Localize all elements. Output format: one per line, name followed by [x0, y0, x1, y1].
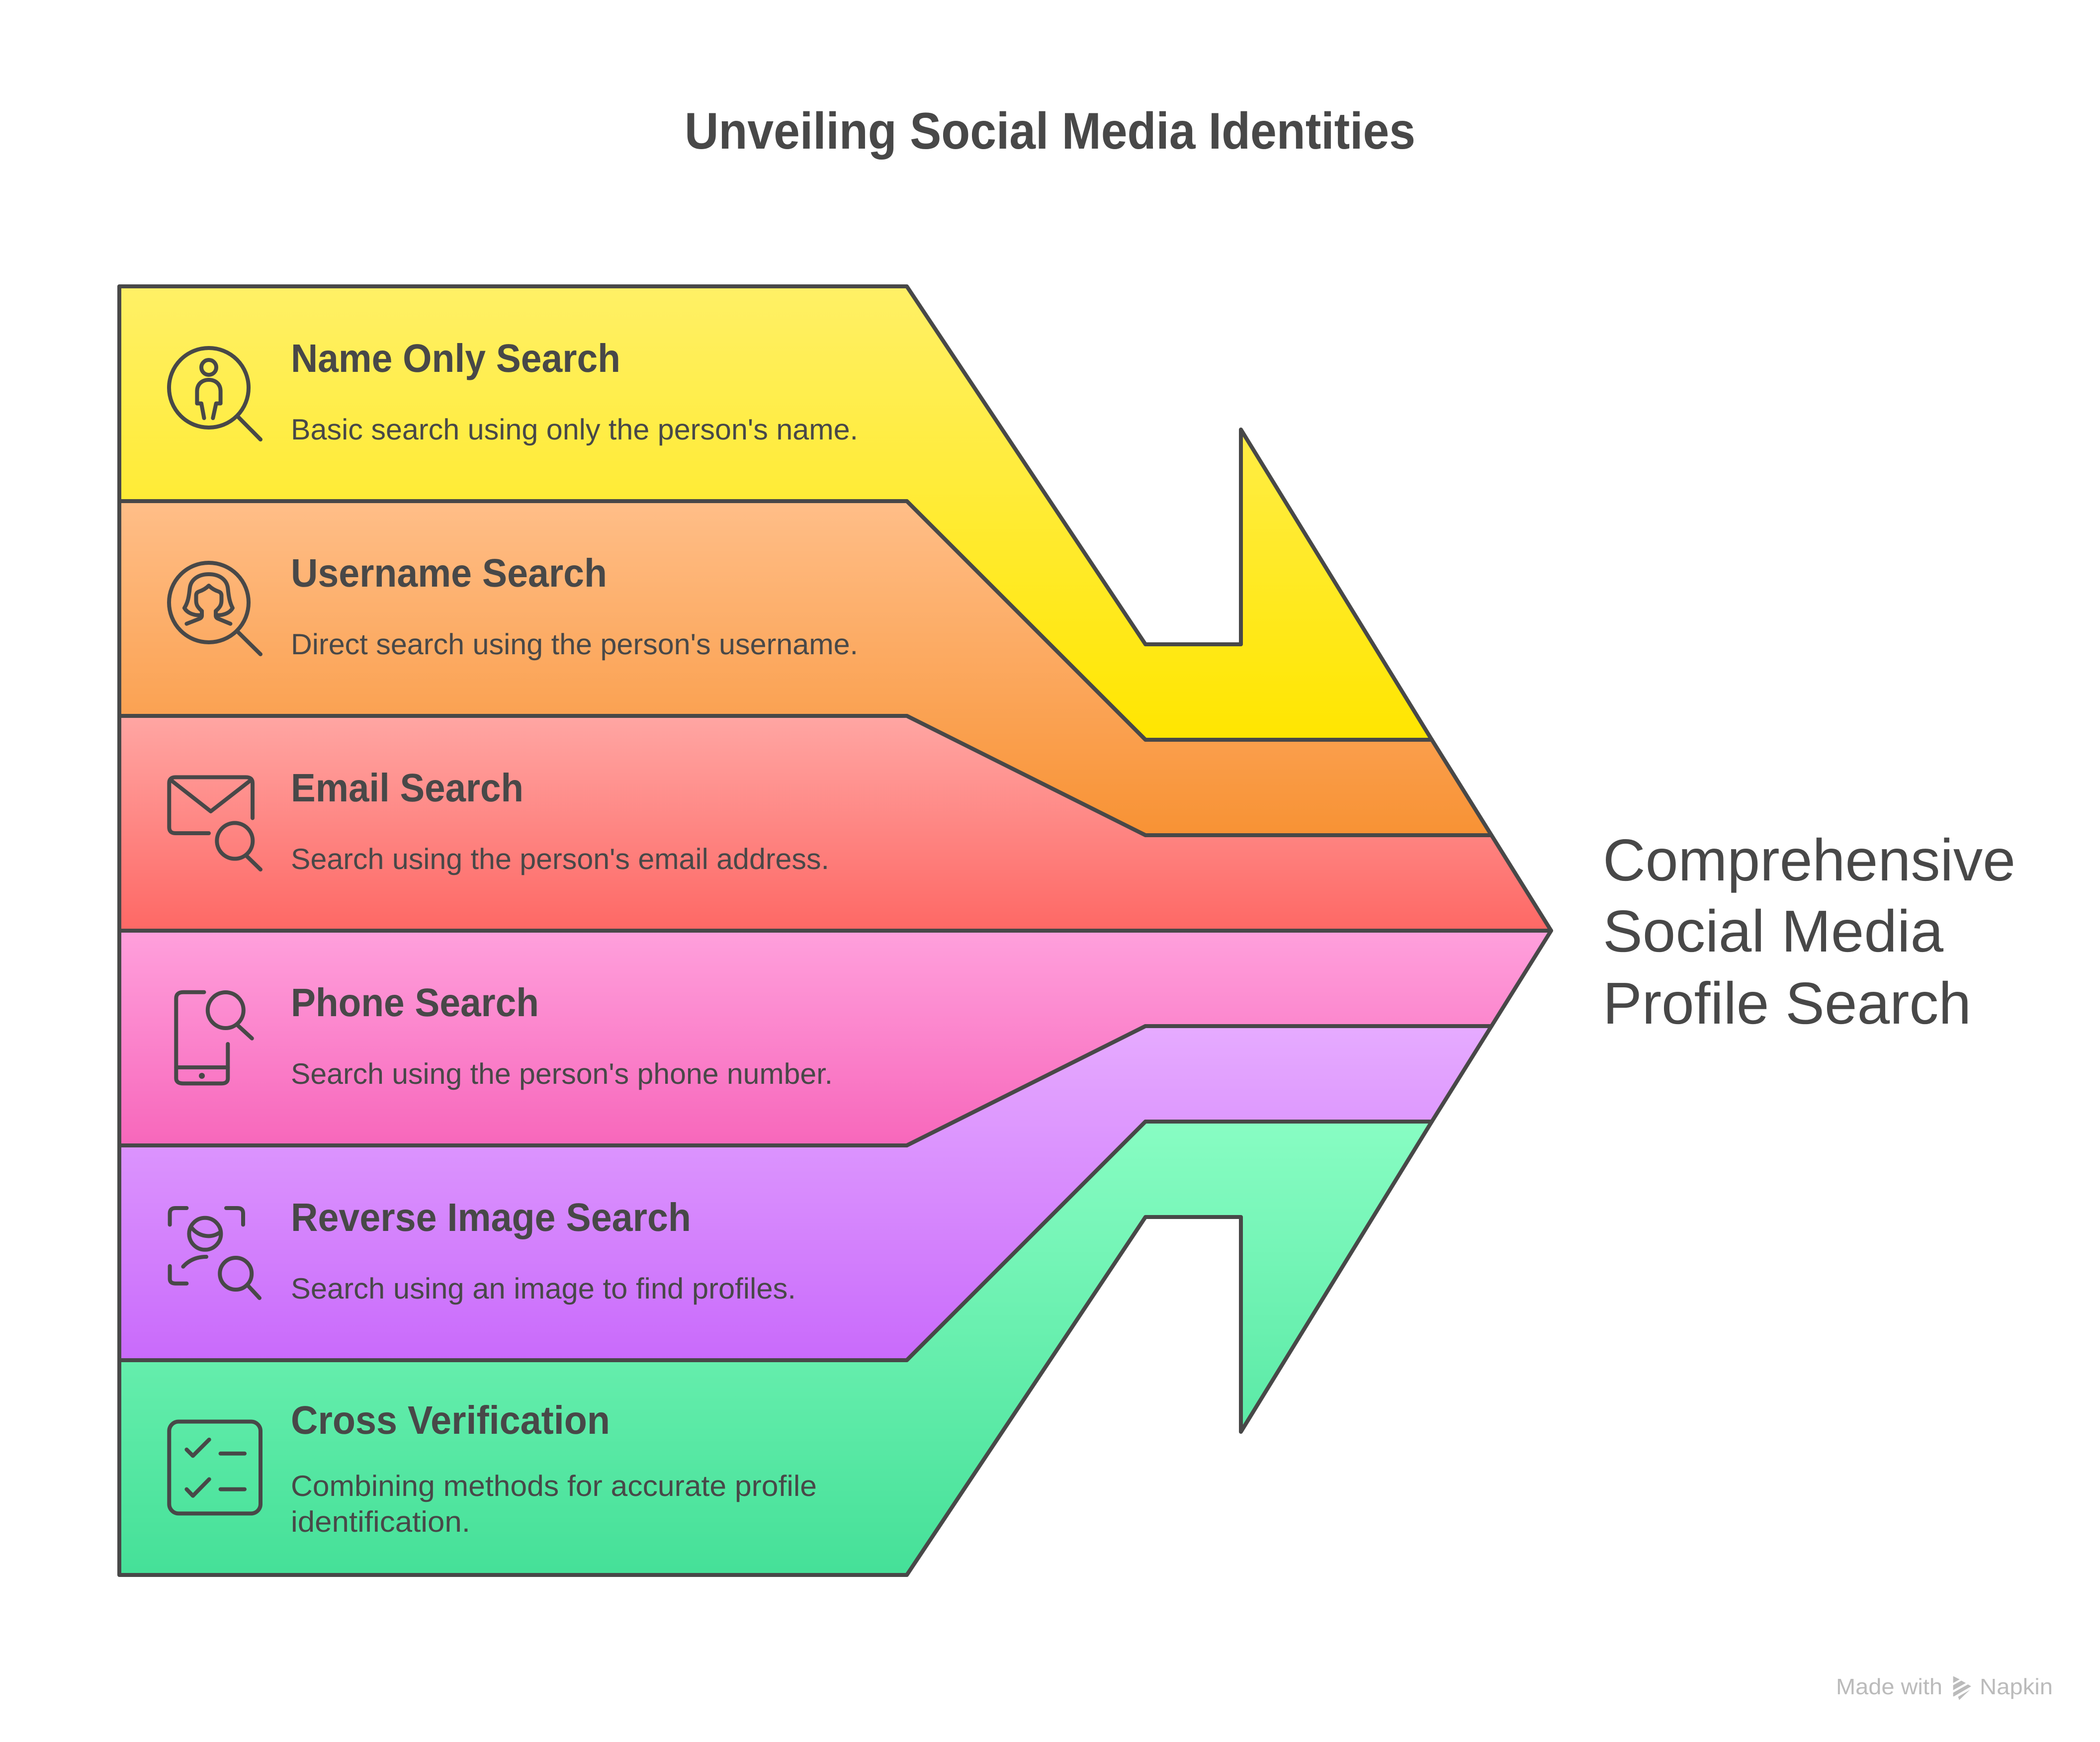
footer: made with napkin: Napkin: [1980, 1674, 2053, 1699]
description: Direct search using the person's username.: [291, 628, 858, 661]
icon: face scan with magnifier: [170, 1208, 260, 1298]
icon: checklist: [169, 1422, 261, 1513]
panel: cross verification: [119, 1122, 1432, 1575]
heading: Reverse Image Search: [291, 1195, 691, 1239]
panel: name only search: [119, 286, 1432, 740]
title: Unveiling Social Media Identities: [685, 102, 1415, 160]
icon: phone with magnifier: [176, 992, 252, 1083]
band: orange: [119, 501, 1491, 835]
band: purple: [119, 1026, 1491, 1360]
footer: made with napkin: Made with: [1836, 1674, 1942, 1699]
footer: made with napkin: [1836, 1674, 2053, 1700]
description: Search using the person's email address.: [291, 843, 829, 875]
description: Combining methods for accurate profile: [291, 1470, 817, 1502]
band: yellow: [119, 286, 1432, 740]
panel: phone search: [119, 931, 1551, 1145]
icon: head in magnifier: [169, 563, 261, 654]
heading: Email Search: [291, 766, 524, 810]
outcome label: Comprehensive: [1603, 827, 2015, 893]
band: green: [119, 1122, 1432, 1575]
description: Search using an image to find profiles.: [291, 1272, 796, 1305]
panel: username search: [119, 501, 1491, 835]
description: Search using the person's phone number.: [291, 1057, 833, 1090]
description: identification.: [291, 1505, 470, 1538]
icon: person in magnifier: [169, 348, 261, 439]
heading: Phone Search: [291, 980, 539, 1025]
description: Basic search using only the person's name.: [291, 413, 858, 446]
panel: email search: [119, 716, 1551, 931]
outcome label: Profile Search: [1603, 970, 1971, 1037]
icon: napkin logo: [1953, 1676, 1971, 1700]
band: red: [119, 716, 1551, 931]
icon: envelope with magnifier: [169, 777, 261, 870]
description: [291, 1470, 817, 1538]
heading: Username Search: [291, 551, 607, 595]
outcome label: Social Media: [1603, 898, 1944, 964]
panel: reverse image search: [119, 1026, 1491, 1360]
heading: Name Only Search: [291, 336, 620, 380]
outcome label: [1603, 827, 2015, 1037]
heading: Cross Verification: [291, 1398, 610, 1442]
band: pink: [119, 931, 1551, 1145]
